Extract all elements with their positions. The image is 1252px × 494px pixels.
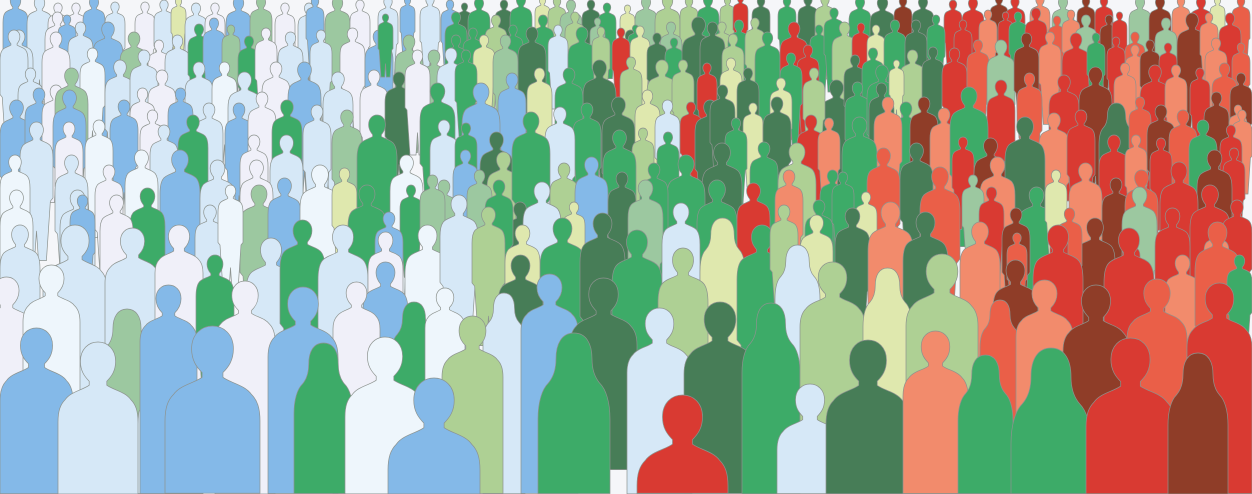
middle rows of the crowd xyxy=(0,83,1252,386)
far rows of the crowd xyxy=(3,0,1250,153)
near rows of the crowd xyxy=(0,254,1252,494)
lower-middle rows of the crowd xyxy=(0,180,1252,494)
upper-middle rows of the crowd xyxy=(0,17,1252,281)
front row of the crowd xyxy=(0,326,1228,494)
